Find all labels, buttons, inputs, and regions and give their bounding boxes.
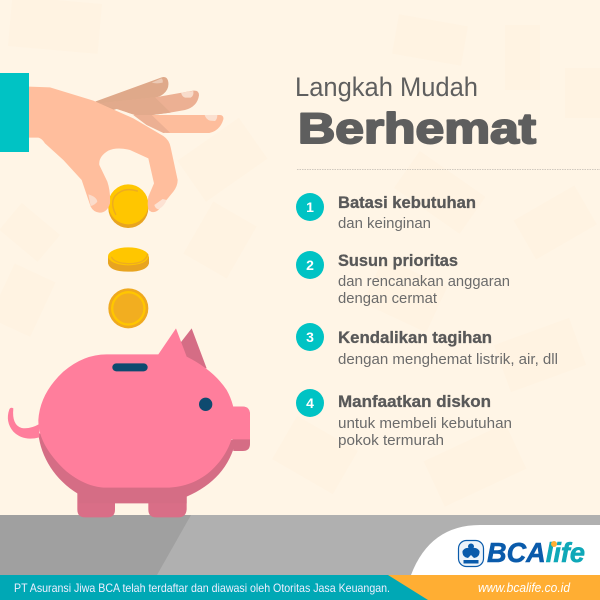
title line: Langkah Mudah: Langkah Mudah — [295, 72, 478, 102]
badge 2 — [296, 251, 324, 279]
icon: pig tail — [8, 408, 39, 439]
icon: pig body shadow — [38, 433, 236, 503]
icon: back finger — [95, 77, 168, 110]
step 1 — [296, 193, 476, 232]
footer website: www.bcalife.co.id — [478, 581, 571, 595]
step 2 text: dan rencanakan anggaran — [338, 274, 510, 290]
step 4 — [296, 389, 512, 449]
step 1 text: dan keinginan — [338, 216, 431, 232]
badge 2: 2 — [306, 257, 314, 273]
step 2 text — [338, 274, 510, 307]
logo wordmark: BCAlife — [487, 537, 585, 568]
logo orange dot — [551, 541, 557, 547]
illustration: hand holding coin — [29, 77, 223, 328]
step 1 heading: Batasi kebutuhan — [338, 193, 476, 212]
step 3 text: dengan menghemat listrik, air, dll — [338, 352, 558, 368]
step 3 heading: Kendalikan tagihan — [338, 328, 492, 347]
footer bar — [0, 575, 600, 600]
title — [295, 72, 536, 153]
step 4 text: untuk membeli kebutuhan — [338, 416, 512, 432]
step 2 — [296, 251, 510, 307]
badge 3 — [296, 323, 324, 351]
step 2 text: dengan cermat — [338, 291, 437, 307]
icon: falling coin front view — [108, 288, 148, 328]
icon: coin slot — [112, 363, 148, 371]
step 4 text: pokok termurah — [338, 433, 444, 449]
icon: pig body — [38, 328, 235, 488]
icon: pig legs — [77, 490, 187, 517]
badge 3: 3 — [306, 329, 314, 345]
icon: index nail — [88, 194, 97, 206]
step 4 text — [338, 416, 512, 449]
badge 1: 1 — [306, 199, 314, 215]
badge 1 — [296, 193, 324, 221]
footer disclaimer: PT Asuransi Jiwa BCA telah terdaftar dan diawasi oleh Otoritas Jasa Keuangan. — [14, 581, 390, 595]
badge 4 — [296, 389, 324, 417]
ground — [0, 515, 600, 575]
icon: pig eye — [199, 398, 212, 411]
step 2 heading: Susun prioritas — [338, 251, 458, 270]
badge 4: 4 — [306, 395, 314, 411]
step 3 — [296, 323, 558, 368]
icon: snout — [230, 407, 250, 451]
logo: BCAlife — [458, 537, 585, 568]
step 4 heading: Manfaatkan diskon — [338, 392, 491, 411]
icon: middle finger — [100, 91, 199, 117]
icon: hand — [29, 87, 178, 213]
logo panel — [411, 525, 600, 575]
icon: back ear — [180, 328, 207, 368]
icon: falling coin side view — [108, 247, 149, 272]
icon: sleeve cuff — [0, 73, 29, 152]
title line: Berhemat: Berhemat — [298, 105, 536, 153]
icon: thumb nail — [154, 199, 167, 209]
icon: coin in fingers — [108, 184, 148, 228]
icon: BCA emblem — [458, 540, 484, 566]
illustration: piggy bank — [8, 328, 250, 517]
icon: front finger — [133, 115, 223, 133]
